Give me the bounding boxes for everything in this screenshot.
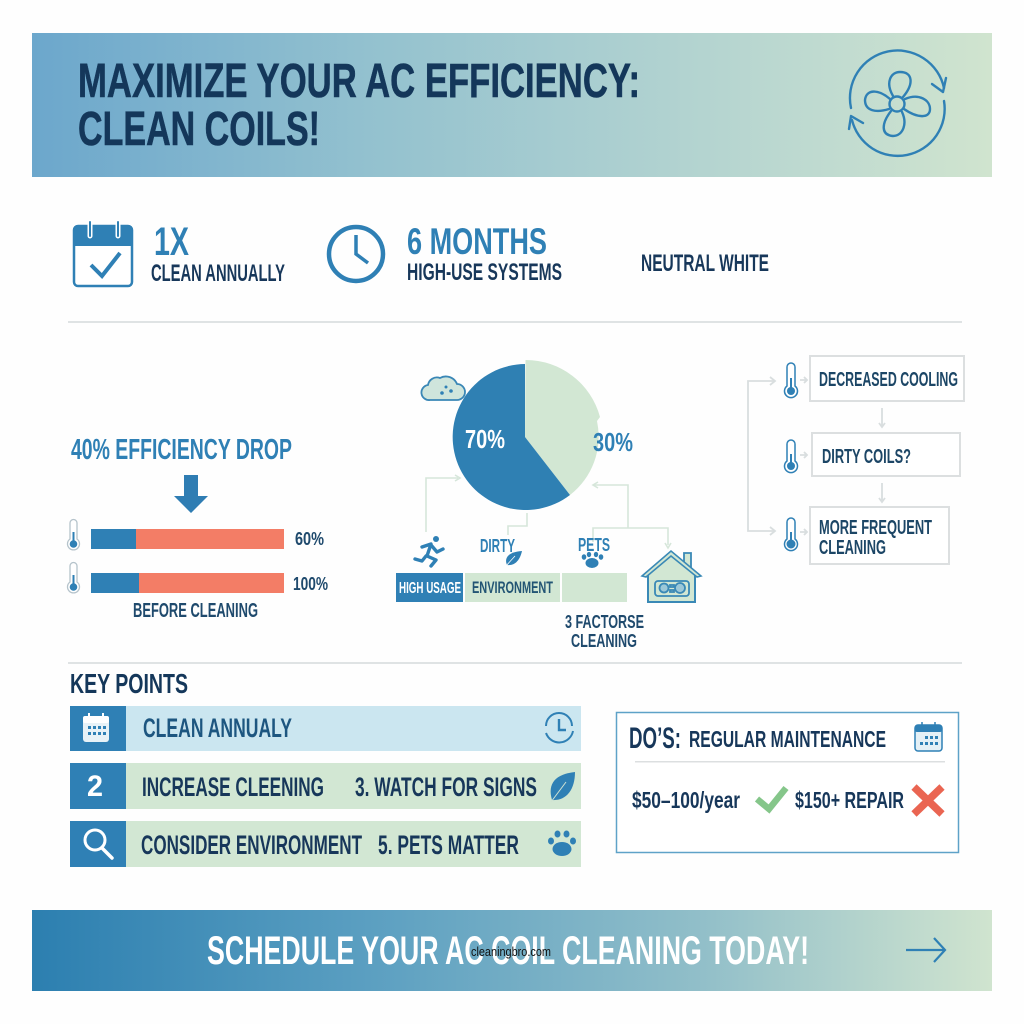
bar chart: efficiency bars: 100% (293, 574, 328, 594)
panel: do's callout (616, 712, 958, 852)
factor bars: ENVIRONMENT (472, 578, 553, 597)
row 3: consider environment, pets matter (70, 821, 581, 867)
bar chart: efficiency bars: 60% (295, 529, 324, 549)
row 2: increase cleaning, watch for signs: 2 (87, 770, 103, 803)
heading: do's regular maintenance (629, 722, 886, 755)
caption: before cleaning: BEFORE CLEANING (133, 600, 258, 622)
bar chart: efficiency bars (91, 529, 328, 594)
heading: key points: KEY POINTS (70, 668, 188, 699)
icon: red x (914, 787, 942, 814)
icon: calendar (915, 722, 942, 751)
stat: 1X clean annually: 1X (154, 220, 189, 264)
icon: thermometer (68, 562, 80, 593)
pie chart: 70% (465, 424, 505, 454)
stats row (74, 220, 769, 287)
row 2: increase cleaning, watch for signs: 3. WATCH FOR SIGNS (355, 772, 537, 802)
icon: runner (415, 536, 443, 566)
pie chart (453, 360, 633, 510)
label: pets with paw (578, 535, 610, 568)
price: yearly maintenance: $50–100/year (632, 787, 740, 813)
stat: 6 months high-use systems: 6 MONTHS (407, 221, 547, 262)
icon: clock (329, 227, 383, 281)
flow box: dirty coils: DIRTY COILS? (822, 446, 911, 468)
row 1: clean annually (70, 706, 581, 751)
stat: 6 months high-use systems: HIGH-USE SYSTEMS (407, 259, 562, 286)
flow box: more frequent cleaning: MORE FREQUENT (819, 517, 932, 539)
row 3: consider environment, pets matter: 5. PETS MATTER (378, 830, 519, 860)
stat: 1X clean annually (151, 220, 285, 287)
title: MAXIMIZE YOUR AC EFFICIENCY: (78, 55, 640, 108)
caption: 3 factors cleaning (565, 612, 644, 651)
label: pets with paw: PETS (578, 535, 610, 555)
flow box: dirty coils (812, 433, 960, 476)
title (78, 55, 640, 156)
caption: 3 factors cleaning: 3 FACTORSE (565, 612, 644, 632)
header banner (32, 33, 992, 177)
icon: thermometer (784, 518, 797, 551)
icon: fan with cycle arrows (849, 50, 946, 156)
stat: 1X clean annually: CLEAN ANNUALLY (151, 260, 285, 287)
icon: thermometer (784, 363, 797, 398)
title: CLEAN COILS! (78, 103, 320, 156)
label: dirty with leaf (480, 536, 522, 567)
panel: key points (70, 668, 581, 867)
icon: check mark (757, 788, 786, 809)
label: dirty with leaf: DIRTY (480, 536, 515, 556)
caption: 3 factors cleaning: CLEANING (571, 631, 637, 651)
factor bars (396, 573, 627, 602)
panel: flowchart (748, 356, 964, 564)
icon: thermometer (784, 440, 797, 473)
heading: do's regular maintenance: DO’S: (629, 722, 681, 755)
icon: calendar with check (74, 222, 132, 286)
row 2: increase cleaning, watch for signs (70, 763, 581, 809)
row 1: clean annually: CLEAN ANNUALY (143, 713, 292, 743)
row 2: increase cleaning, watch for signs: INCREASE CLEENING (142, 772, 324, 802)
icon: thermometer (68, 520, 80, 550)
panel: pie chart and factors (396, 360, 701, 651)
factor bars: HIGH USAGE (399, 580, 461, 597)
flow box: decreased cooling (810, 356, 964, 401)
heading: 40% efficiency drop: 40% EFFICIENCY DROP (71, 434, 292, 466)
footer banner (32, 910, 992, 991)
arrow: down (174, 475, 208, 513)
pie chart: 30% (593, 427, 633, 457)
icon: dust cloud (421, 376, 465, 400)
price: repair cost: $150+ REPAIR (795, 787, 904, 813)
icon: house with coil unit (642, 551, 701, 602)
stat: 6 months high-use systems (407, 221, 562, 286)
connector lines (426, 475, 671, 548)
panel: efficiency drop (68, 434, 328, 622)
row 3: consider environment, pets matter: CONSIDER ENVIRONMENT (141, 830, 362, 860)
flow box: more frequent cleaning (810, 507, 949, 564)
flow box: more frequent cleaning: CLEANING (819, 537, 886, 559)
heading: do's regular maintenance: REGULAR MAINTENANCE (689, 726, 886, 752)
watermark: cleaningbro.com (471, 944, 551, 959)
arrow: right (906, 938, 945, 962)
label: neutral white: NEUTRAL WHITE (641, 250, 769, 277)
connector arrows (748, 377, 885, 535)
